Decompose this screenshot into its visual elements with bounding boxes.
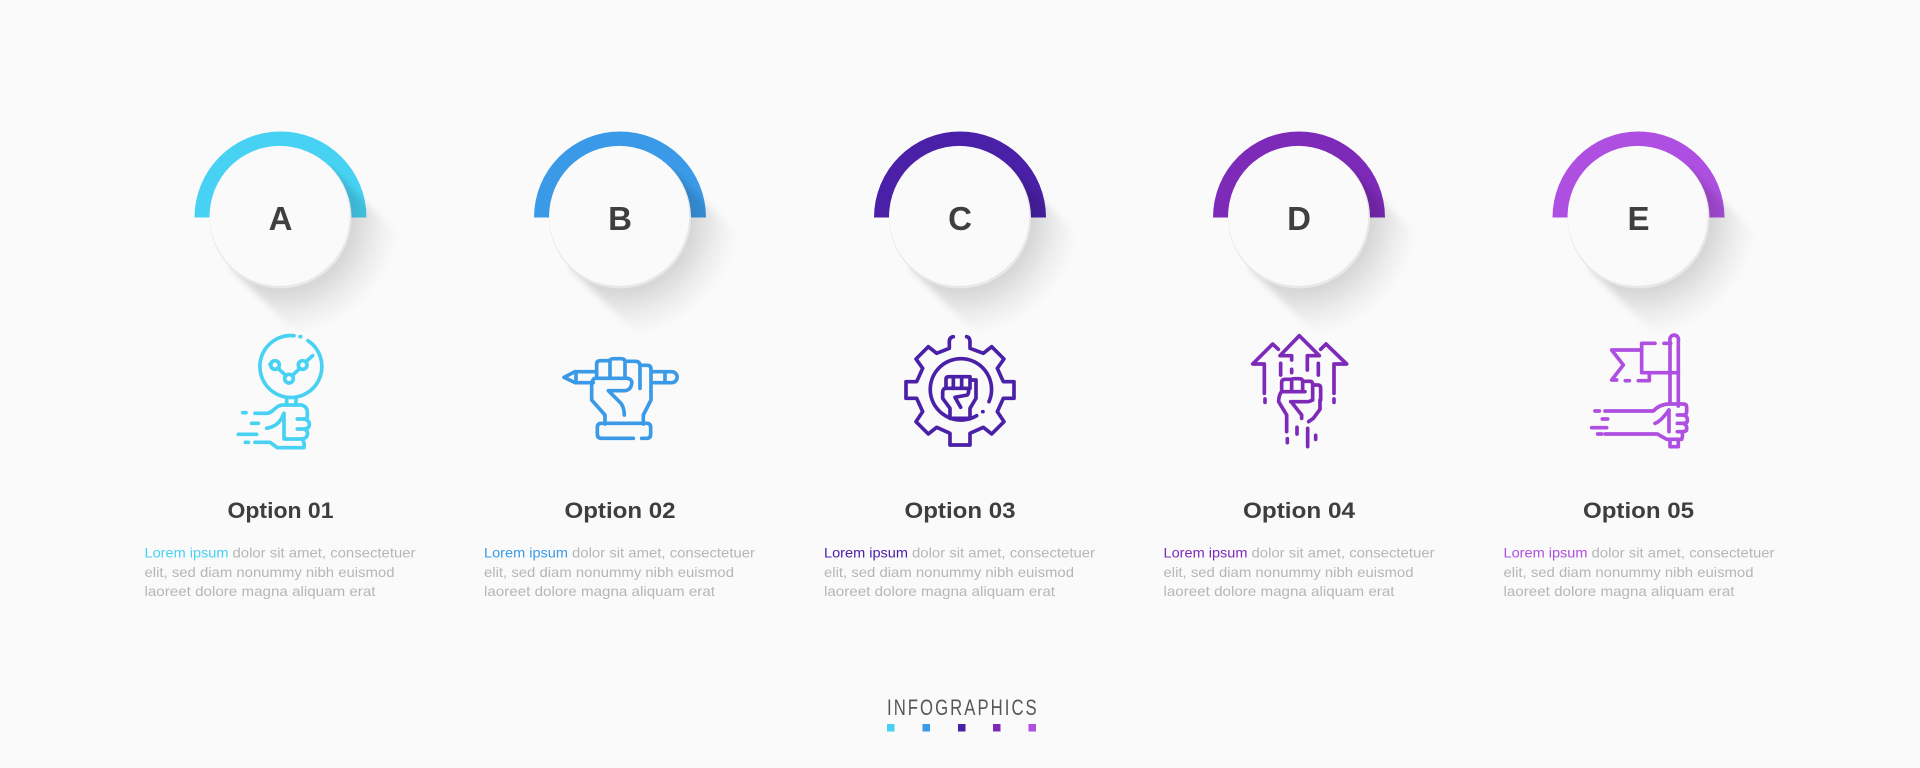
heading: Option 02 — [564, 498, 676, 523]
text block: Lorem ipsum — [484, 544, 568, 560]
icon: fist holding pencil — [564, 359, 677, 438]
text block: laoreet dolore magna aliquam erat — [1504, 583, 1735, 599]
panel: option B — [484, 132, 755, 599]
icon: fist with three up arrows — [1253, 336, 1347, 447]
text block: laoreet dolore magna aliquam erat — [144, 583, 376, 599]
badge D: D — [1287, 200, 1311, 237]
text block — [1504, 544, 1775, 599]
text block: Lorem ipsum — [144, 544, 228, 560]
text block: laoreet dolore magna aliquam erat — [824, 583, 1055, 599]
text block: elit, sed diam nonummy nibh euismod — [1164, 564, 1414, 580]
badge E — [1552, 132, 1774, 352]
panel: option A — [144, 132, 416, 599]
text block: laoreet dolore magna aliquam erat — [1164, 583, 1395, 599]
panel: option E — [1504, 132, 1775, 599]
badge E: E — [1627, 200, 1650, 237]
badge A — [194, 132, 416, 352]
text block: dolor sit amet, consectetuer — [572, 544, 755, 560]
heading: Option 05 — [1583, 498, 1694, 523]
heading: Option 03 — [904, 498, 1016, 523]
text block: elit, sed diam nonummy nibh euismod — [144, 564, 394, 580]
badge B: B — [608, 200, 632, 237]
text block: Lorem ipsum — [1164, 544, 1248, 560]
text block: elit, sed diam nonummy nibh euismod — [484, 564, 734, 580]
text block — [144, 544, 416, 599]
icon: hand holding flag — [1592, 335, 1687, 447]
panel: option C — [824, 132, 1095, 599]
text block — [824, 544, 1095, 599]
heading: Option 01 — [228, 498, 334, 523]
badge A: A — [269, 200, 292, 237]
text block: dolor sit amet, consectetuer — [1252, 544, 1435, 560]
text block: laoreet dolore magna aliquam erat — [484, 583, 715, 599]
badge B — [534, 132, 755, 352]
panel: option D — [1164, 132, 1435, 599]
icon: hand holding magnifier with chart — [238, 336, 322, 448]
text block: elit, sed diam nonummy nibh euismod — [1504, 564, 1754, 580]
text block: elit, sed diam nonummy nibh euismod — [824, 564, 1074, 580]
footer title: INFOGRAPHICS — [887, 696, 1037, 721]
text block: dolor sit amet, consectetuer — [232, 544, 416, 560]
text block — [1164, 544, 1435, 599]
text block: dolor sit amet, consectetuer — [1592, 544, 1775, 560]
text block — [484, 544, 755, 599]
text block: Lorem ipsum — [824, 544, 908, 560]
footer colour squares — [887, 724, 1036, 732]
text block: dolor sit amet, consectetuer — [912, 544, 1095, 560]
text block: Lorem ipsum — [1504, 544, 1588, 560]
badge C: C — [948, 200, 972, 237]
badge C — [874, 132, 1095, 352]
badge D — [1213, 132, 1434, 352]
icon: gear with fist — [906, 337, 1014, 445]
heading: Option 04 — [1243, 498, 1356, 523]
